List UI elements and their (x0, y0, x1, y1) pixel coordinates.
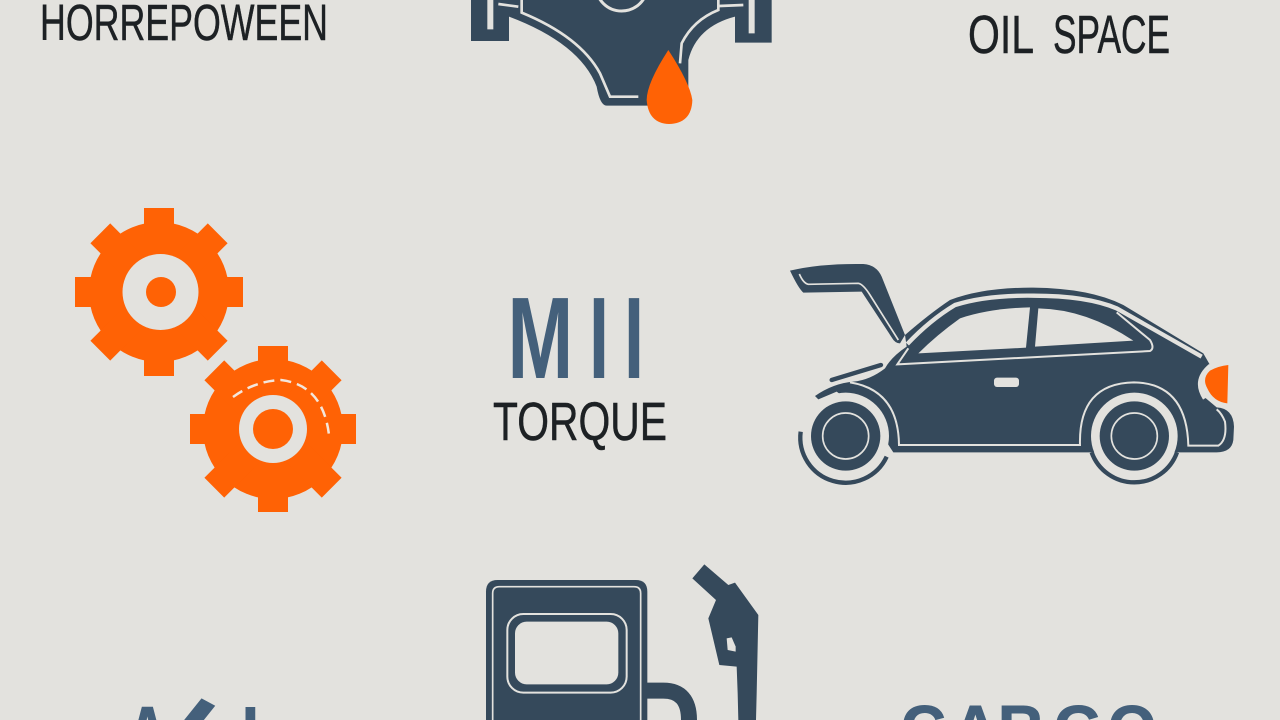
gear: upper (75, 208, 243, 376)
door handle (994, 378, 1019, 387)
body trim line (850, 382, 1225, 446)
rear wheel (1091, 393, 1178, 482)
open hood (790, 264, 905, 343)
stat: large MII value: I (589, 275, 609, 403)
stat: large MII value: I (624, 275, 644, 403)
heading: oil space label: SPACE (1053, 5, 1170, 65)
hose (647, 691, 689, 720)
heading: oil space label: OIL (968, 5, 1034, 65)
gear: lower (190, 346, 356, 512)
hood lip (832, 365, 881, 380)
icon: car with open hood (790, 264, 1234, 483)
cabin and sill line (897, 312, 1152, 364)
stat: large MII value (508, 274, 644, 404)
stat: large MII value: M (508, 274, 573, 404)
front wheel (800, 393, 889, 483)
pump body (486, 580, 647, 720)
car body silhouette (815, 288, 1234, 452)
pump display (507, 614, 627, 693)
heading: oil space label (968, 5, 1170, 65)
icon: two orange gears (75, 208, 356, 512)
icon: fuel pump (486, 564, 758, 720)
nozzle (692, 564, 758, 720)
roof gap line (907, 296, 1202, 357)
icon: engine with oil drop (471, 0, 772, 124)
heading: cargo label (901, 694, 1156, 720)
heading: torque label: TORQUE (493, 392, 667, 452)
heading: partial label bottom left (124, 682, 260, 720)
tail light (1200, 366, 1211, 398)
windows (918, 307, 1030, 353)
